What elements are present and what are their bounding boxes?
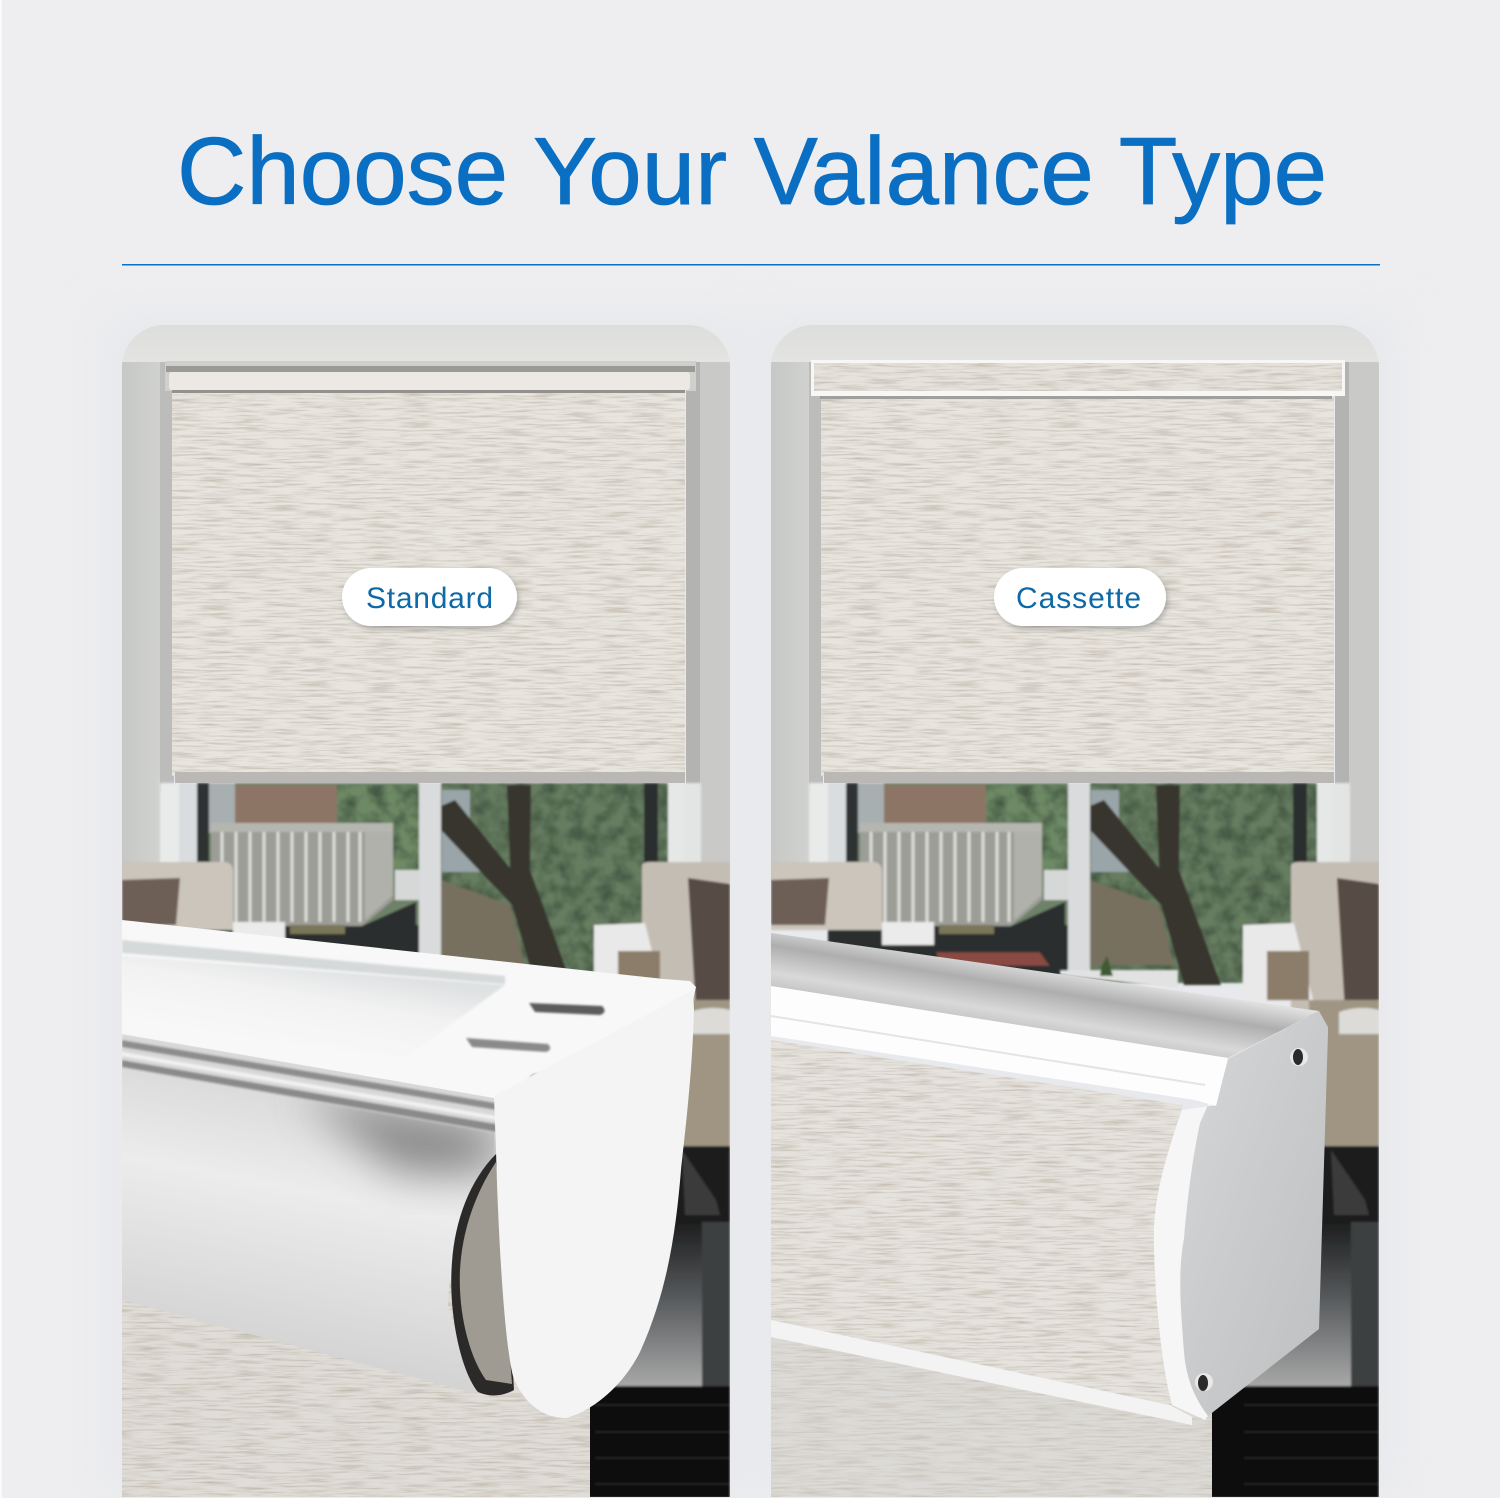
label: Standard: Standard (366, 582, 493, 615)
white front band (771, 986, 1228, 1106)
curved white trim (1154, 1059, 1228, 1420)
side face (1180, 1011, 1328, 1416)
mounting top plate (122, 920, 696, 1098)
lower fabric (771, 1300, 1212, 1498)
label: Standard (342, 568, 517, 626)
label: Cassette: Cassette (1016, 582, 1141, 615)
standard headrail (165, 361, 696, 393)
silver top (771, 933, 1319, 1058)
valance fabric (771, 1040, 1183, 1405)
title: Choose Your Valance Type (177, 118, 1327, 225)
screw top (1290, 1048, 1308, 1066)
roller end hub (451, 1154, 514, 1396)
window scene with roller shade (771, 325, 1379, 1498)
end cap (494, 990, 694, 1418)
panel: standard valance (122, 325, 730, 1498)
bottom rail (771, 1320, 1192, 1425)
cassette headrail (811, 360, 1345, 399)
window scene with roller shade (122, 325, 730, 1498)
roller tube (122, 1066, 494, 1394)
screw bottom (1195, 1373, 1213, 1391)
roller shadow (300, 1095, 494, 1170)
slots (466, 1003, 605, 1082)
lower fabric (122, 1280, 590, 1498)
panel: cassette valance (771, 325, 1379, 1498)
channel (122, 940, 506, 1018)
label: Cassette (994, 568, 1166, 626)
outdoor detail (936, 952, 1178, 988)
roller rails (122, 1034, 496, 1133)
